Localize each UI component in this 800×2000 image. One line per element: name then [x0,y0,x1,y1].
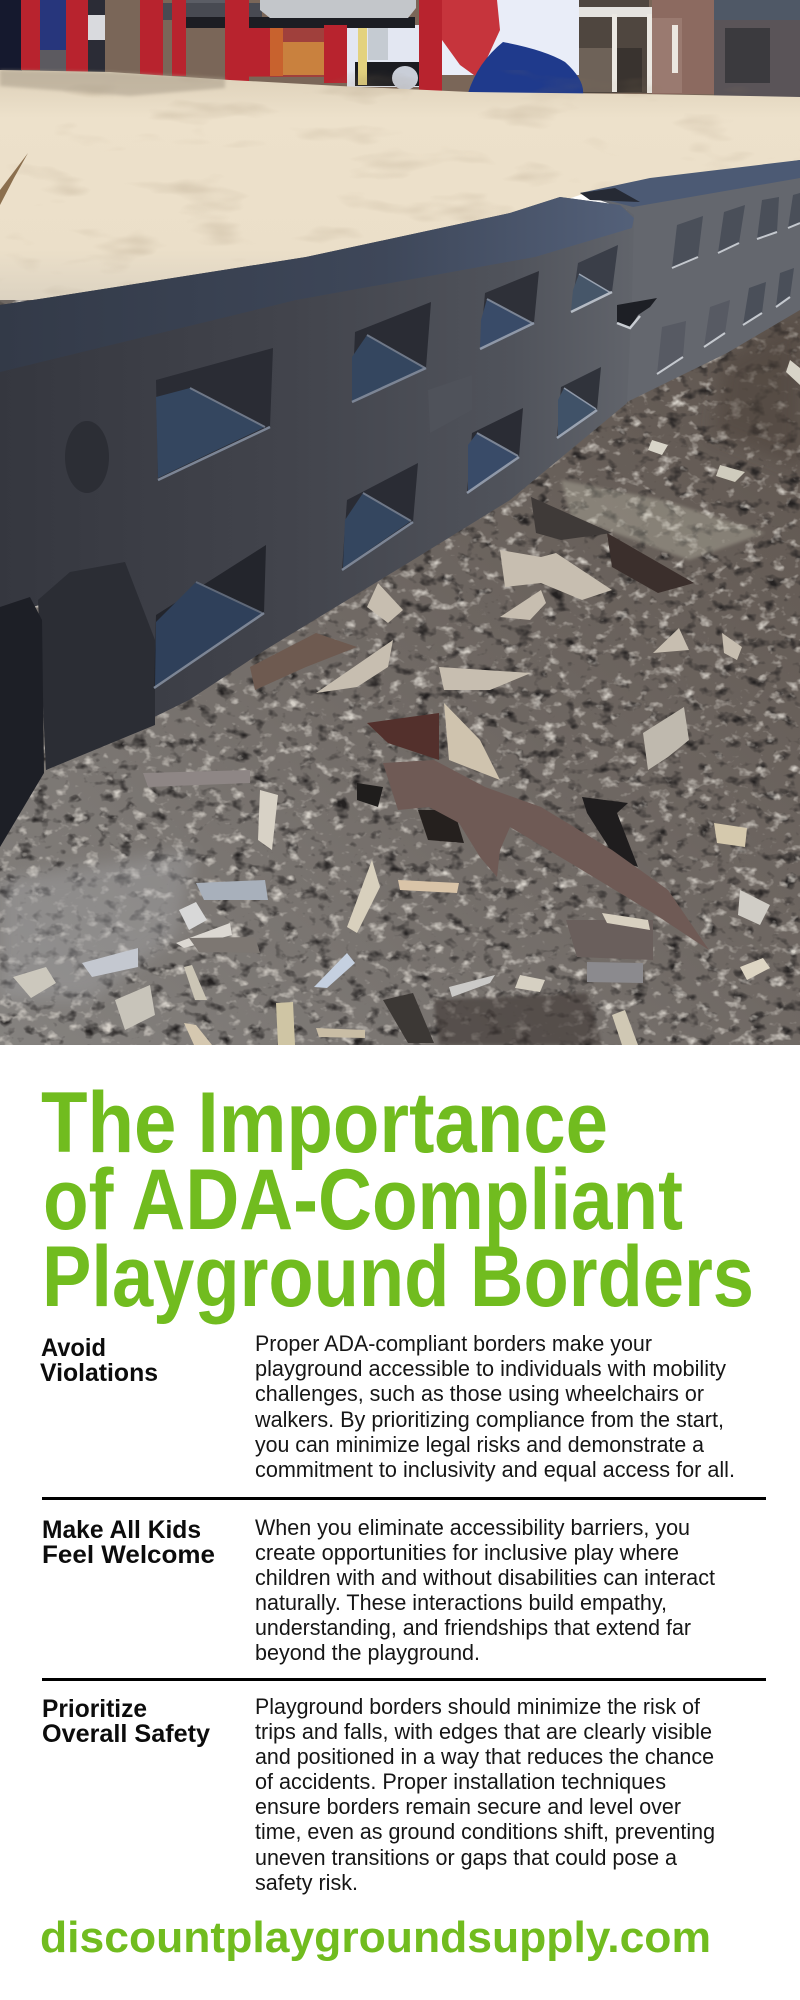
heading: Prioritize Overall Safety: Prioritize [42,1695,147,1723]
title [41,1075,754,1325]
body text: Avoid Violations: challenges, such as those using wheelchairs or [255,1381,704,1406]
body text: Make All Kids Feel Welcome: beyond the playground. [255,1640,480,1665]
body text: Make All Kids Feel Welcome: create opportunities for inclusive play where [255,1540,679,1565]
body text: Prioritize Overall Safety: ensure borders remain secure and level over [255,1794,681,1819]
body text: Avoid Violations: walkers. By prioritizing compliance from the start, [254,1407,724,1432]
section: Make All Kids Feel Welcome [42,1515,715,1665]
title: of ADA-Compliant [43,1152,683,1248]
brown soil upper right [714,317,800,467]
body text: Avoid Violations: playground accessible to individuals with mobility [255,1356,726,1381]
body text: Make All Kids Feel Welcome: naturally. These interactions build empathy, [255,1590,667,1615]
reddish leaves [250,633,439,760]
far section windows [657,193,800,374]
body text: Avoid Violations [254,1331,735,1482]
heading: Make All Kids Feel Welcome [42,1516,215,1569]
left end block [0,597,44,847]
divider 2 [42,1678,766,1681]
body text: Prioritize Overall Safety: uneven transitions or gaps that could pose a [255,1845,678,1870]
body text: Prioritize Overall Safety [255,1694,715,1895]
border: near section [0,197,657,847]
body text: Prioritize Overall Safety: Playground borders should minimize the risk of [255,1694,701,1719]
joint notch [617,298,657,328]
body text: Avoid Violations: commitment to inclusivity and equal access for all. [255,1457,735,1482]
mulch ground [0,300,800,1045]
body text: Prioritize Overall Safety: of accidents. Proper installation techniques [255,1769,666,1794]
heading: Make All Kids Feel Welcome: Make All Kids [42,1516,201,1544]
dark clumps [357,497,694,1045]
grey fuzzy patch at lower left [0,850,194,1000]
body text: Make All Kids Feel Welcome [255,1515,715,1665]
body text: Prioritize Overall Safety: time, even as ground conditions shift, preventing [255,1819,715,1844]
blue slide [468,42,584,94]
pale leaves [316,550,742,780]
scuff marks [65,421,109,493]
border: far section [580,160,800,402]
body text: Make All Kids Feel Welcome: When you eliminate accessibility barriers, you [255,1515,690,1540]
body text: Prioritize Overall Safety: trips and falls, with edges that are clearly visible [255,1719,712,1744]
heading: Prioritize Overall Safety [42,1695,210,1748]
section: Avoid Violations [40,1331,735,1482]
heading: Prioritize Overall Safety: Overall Safety [42,1720,210,1748]
photo: playground border on mulch [0,0,800,1045]
dark lower-left bulge [38,562,155,770]
title: The Importance [41,1075,608,1171]
heading: Make All Kids Feel Welcome: Feel Welcome [42,1541,215,1569]
website URL: discountplaygroundsupply.com [40,1913,711,1962]
section: Prioritize Overall Safety [42,1694,715,1895]
body text: Make All Kids Feel Welcome: children with and without disabilities can interact [255,1565,715,1590]
wood chips [13,325,800,1045]
windows upper row [156,245,618,480]
big brown leaf [383,760,709,950]
body text: Prioritize Overall Safety: safety risk. [255,1870,358,1895]
body text: Avoid Violations: Proper ADA-compliant borders make your [255,1331,652,1356]
heading: Avoid Violations [40,1334,158,1387]
background: playground equipment and buildings [0,0,800,100]
body text: Make All Kids Feel Welcome: understanding, and friendships that extend far [255,1615,691,1640]
windows lower row [154,367,601,688]
heading: Avoid Violations: Avoid [41,1334,106,1362]
light speckled cluster [561,480,765,560]
body text: Avoid Violations: you can minimize legal risks and demonstrate a [255,1432,705,1457]
red posts [21,0,442,94]
body text: Prioritize Overall Safety: and positioned in a way that reduces the chance [255,1744,714,1769]
divider 1 [42,1497,766,1500]
sand [0,70,800,312]
heading: Avoid Violations: Violations [40,1359,158,1387]
